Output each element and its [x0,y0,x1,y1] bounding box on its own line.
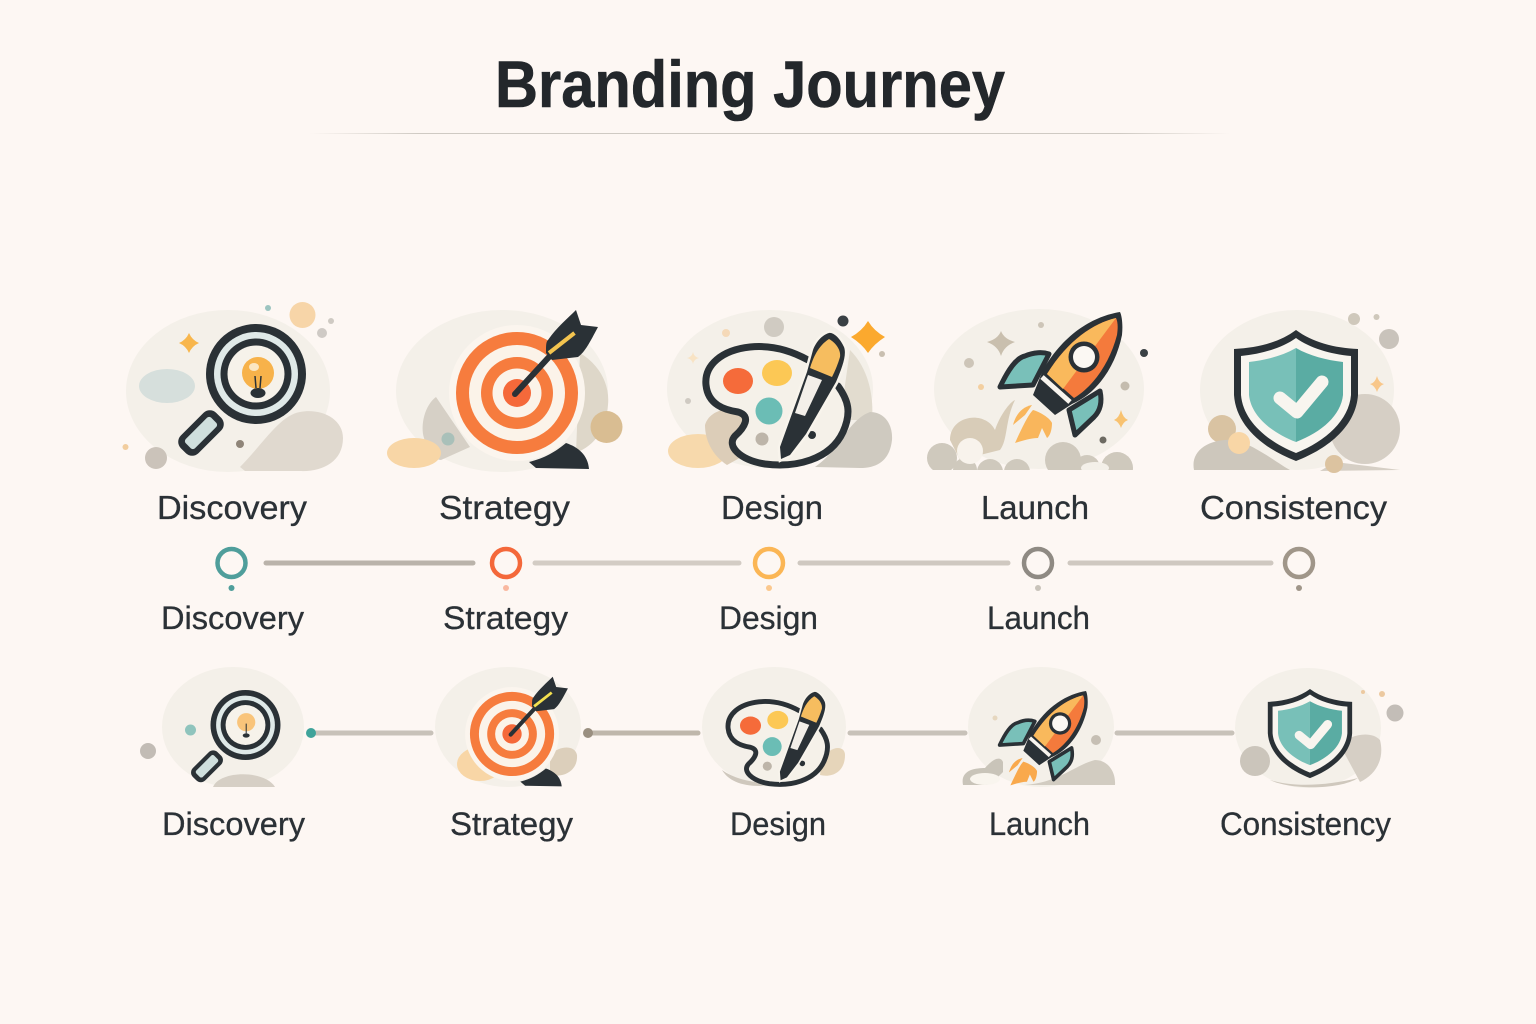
step: discovery (large) [122,302,343,472]
step: strategy (large) [387,310,622,472]
step: consistency (large) [1193,310,1400,473]
label: design: Design [721,489,823,526]
icon: shield with check [1234,330,1358,461]
timeline labels: Discovery [161,600,304,636]
connector lines: small row [306,728,1232,738]
label: discovery: Discovery [157,489,308,526]
label: design small: Design [730,806,826,842]
label: strategy: Strategy [439,489,571,526]
step: launch (large) [927,309,1148,485]
icon: magnifying glass [174,324,306,460]
title: Branding Journey [495,47,1005,121]
icon: rocket [1000,312,1122,443]
timeline: five nodes [218,549,1313,591]
small step: launch [963,667,1115,787]
label: launch small: Launch [989,806,1090,842]
small step: discovery [140,667,304,787]
icon: paint palette and brush [706,333,848,465]
timeline labels: Design [719,600,818,636]
timeline labels: Strategy [443,600,568,636]
small step: strategy [435,667,581,787]
label: consistency small: Consistency [1220,806,1391,842]
small step: consistency [1235,668,1404,788]
timeline labels [161,600,1090,636]
label: consistency: Consistency [1200,489,1388,526]
timeline labels: Launch [987,600,1090,636]
smoke clouds [927,400,1133,470]
label: strategy small: Strategy [450,806,573,842]
step: design (large) [667,310,892,468]
small step: design [702,667,846,787]
icon: target with arrow [449,310,598,461]
label: discovery small: Discovery [162,806,305,842]
label: launch: Launch [981,489,1089,526]
